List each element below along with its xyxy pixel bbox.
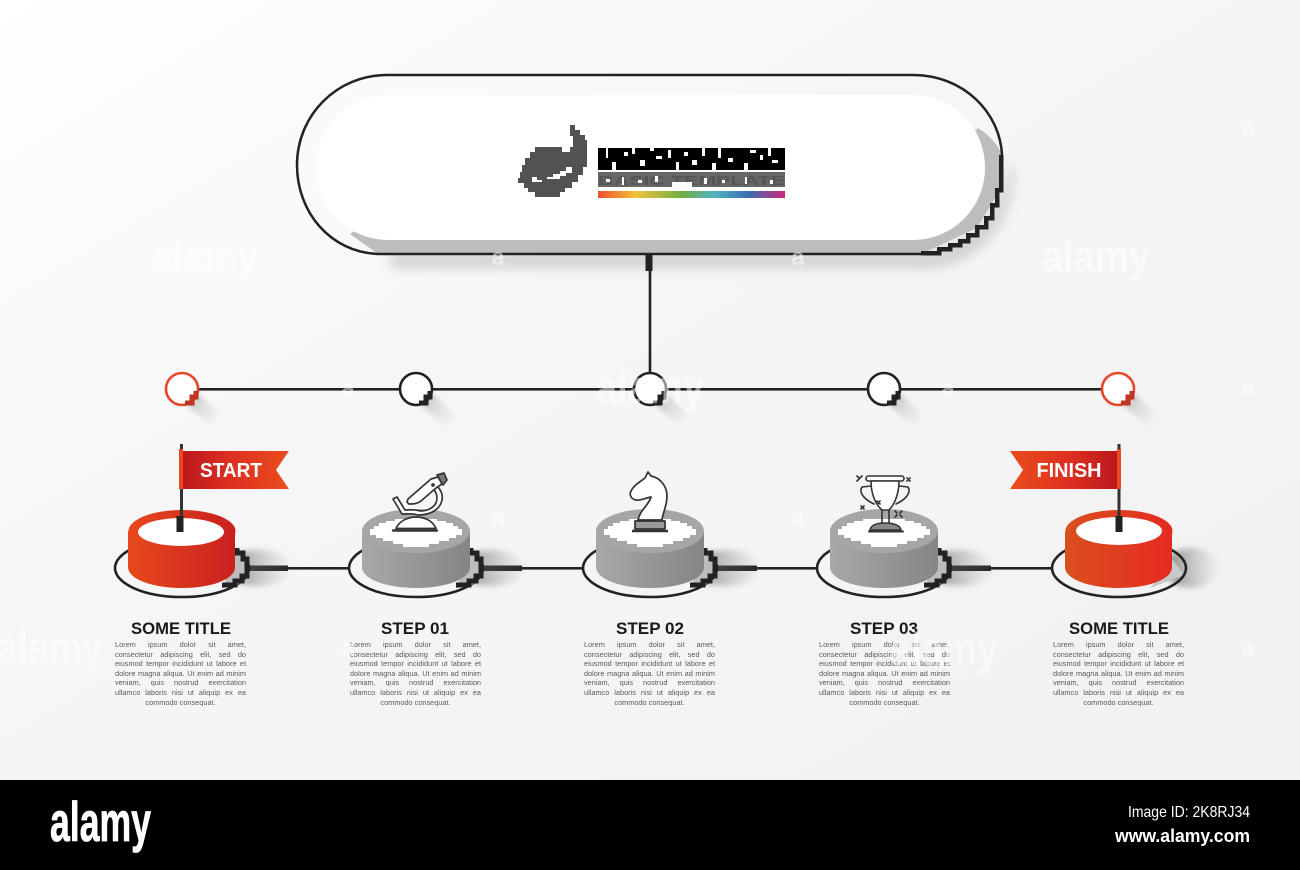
platform: finish (1052, 510, 1220, 597)
text block: step 02: veniam, quis nostrud exercitation (584, 678, 715, 687)
watermarks: alamy (0, 621, 103, 673)
text block: step 02: consectetur adipiscing elit, sed do (584, 650, 715, 659)
node: finish circle (1102, 373, 1156, 427)
text block: step 03: ullamco laboris nisi ut aliquip ex ea (819, 688, 950, 697)
text block: step 03 (819, 640, 950, 707)
footer image id: Image ID: 2K8RJ34 (1128, 804, 1250, 821)
heading: step 01: STEP 01 (381, 619, 449, 638)
watermarks: a (1241, 114, 1255, 141)
icon: microscope (393, 473, 447, 530)
text block: step 01: dolore magna aliqua. Ut enim ad minim (350, 669, 481, 678)
text block: some title right: dolore magna aliqua. Ut enim ad minim (1053, 669, 1184, 678)
text block: step 01: veniam, quis nostrud exercitation (350, 678, 481, 687)
text block: step 02 (584, 640, 715, 707)
watermarks: a (791, 244, 805, 271)
watermarks: a (341, 635, 355, 662)
timeline line (182, 388, 1118, 391)
text block: step 03: eiusmod tempor incididunt ut labore et (819, 659, 950, 668)
text block: step 01: consectetur adipiscing elit, sed do (350, 650, 481, 659)
text block: step 01: ullamco laboris nisi ut aliquip ex ea (350, 688, 481, 697)
text block: step 02: ullamco laboris nisi ut aliquip ex ea (584, 688, 715, 697)
node: step 01 circle (400, 373, 454, 427)
text block: step 01 (350, 640, 481, 707)
platform: step 03 (817, 509, 996, 597)
logo title: INFOGRAPHICS (598, 147, 785, 173)
flag: finish: FINISH (1036, 460, 1102, 482)
heading: some title right: SOME TITLE (1069, 619, 1169, 638)
text block: some title left: consectetur adipiscing elit, sed do (115, 650, 246, 659)
text block: some title left: ullamco laboris nisi ut aliquip ex ea (115, 688, 246, 697)
text block: some title left (115, 640, 246, 707)
text block: some title left: commodo consequat. (145, 698, 216, 707)
icon: logo swoosh (518, 125, 587, 197)
footer url: www.alamy.com (1114, 826, 1250, 846)
flag: start (176, 444, 289, 532)
text block: step 01: commodo consequat. (380, 698, 451, 707)
text block: some title right: veniam, quis nostrud exercitation (1053, 678, 1184, 687)
icon: trophy (857, 476, 910, 532)
panel: header pill (297, 75, 1014, 268)
icon: chess knight (630, 472, 668, 531)
watermarks: alamy (890, 623, 998, 675)
text block: step 02: eiusmod tempor incididunt ut labore et (584, 659, 715, 668)
text block: step 01: Lorem ipsum dolor sit amet, (350, 640, 481, 649)
logo rainbow bar (598, 191, 785, 198)
node: step 03 circle (868, 373, 922, 427)
text block: some title right: eiusmod tempor incididunt ut labore et (1053, 659, 1184, 668)
text block: some title left: veniam, quis nostrud exercitation (115, 678, 246, 687)
text block: step 01: eiusmod tempor incididunt ut labore et (350, 659, 481, 668)
connector: pill to timeline (646, 255, 652, 389)
node: step 02 circle (634, 373, 688, 427)
text block: step 03: consectetur adipiscing elit, sed do (819, 650, 950, 659)
text block: step 03: Lorem ipsum dolor sit amet, (819, 640, 950, 649)
text block: some title right: Lorem ipsum dolor sit amet, (1053, 640, 1184, 649)
footer bar (0, 780, 1300, 870)
logo (518, 125, 786, 198)
text block: step 02: dolore magna aliqua. Ut enim ad minim (584, 669, 715, 678)
logo subtitle (598, 172, 786, 188)
text block: step 03: veniam, quis nostrud exercitation (819, 678, 950, 687)
text block: some title right: consectetur adipiscing elit, sed do (1053, 650, 1184, 659)
watermarks: alamy (596, 361, 704, 413)
text block: some title left: eiusmod tempor incididunt ut labore et (115, 659, 246, 668)
text block: some title right: ullamco laboris nisi ut aliquip ex ea (1053, 688, 1184, 697)
watermarks: a (341, 375, 355, 402)
watermarks: a (1241, 375, 1255, 402)
text block: some title right (1053, 640, 1184, 707)
text block: step 03: commodo consequat. (849, 698, 920, 707)
text block: some title left: dolore magna aliqua. Ut enim ad minim (115, 669, 246, 678)
footer logo: alamy (50, 790, 151, 853)
heading: step 02: STEP 02 (616, 619, 684, 638)
watermarks: a (1241, 635, 1255, 662)
flag: start: START (200, 460, 262, 482)
flag: finish (1010, 444, 1122, 532)
platform: step 01 (349, 509, 528, 597)
logo subtitle: BASIC TEMPLATE (598, 173, 786, 188)
lower connector lines (248, 566, 1052, 571)
watermarks: alamy (1042, 230, 1150, 282)
text block: some title left: Lorem ipsum dolor sit amet, (115, 640, 246, 649)
platform: step 02 (583, 509, 762, 597)
text block: step 02: Lorem ipsum dolor sit amet, (584, 640, 715, 649)
text block: step 03: dolore magna aliqua. Ut enim ad minim (819, 669, 950, 678)
text block: step 02: commodo consequat. (614, 698, 685, 707)
text block: some title right: commodo consequat. (1083, 698, 1154, 707)
watermarks: a (491, 244, 505, 271)
heading: some title left: SOME TITLE (131, 619, 231, 638)
node: start circle (166, 373, 220, 427)
watermarks: alamy (151, 230, 259, 282)
watermarks: a (791, 504, 805, 531)
heading: step 03: STEP 03 (850, 619, 918, 638)
watermarks: a (491, 504, 505, 531)
watermarks: a (941, 375, 955, 402)
platform: start (115, 510, 294, 597)
